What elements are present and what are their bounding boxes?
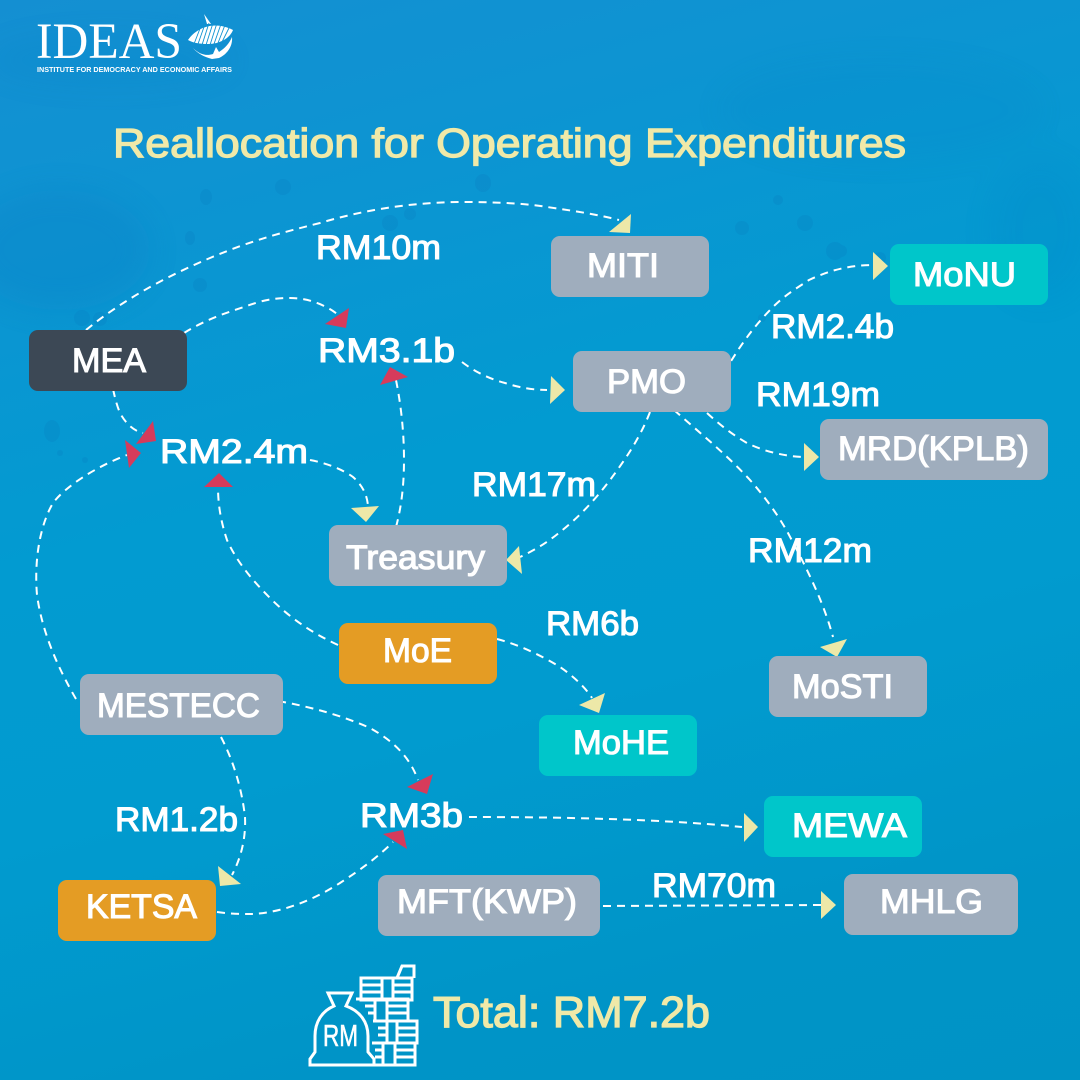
- box: KETSA: KETSA: [86, 888, 197, 926]
- box: MoNU: [890, 244, 1048, 305]
- box: MESTECC: [80, 674, 283, 735]
- box: MRD(KPLB): MRD(KPLB): [838, 430, 1029, 468]
- arrow: PMO to MoNU: [724, 252, 888, 373]
- logo: IDEAS: IDEAS: [36, 14, 182, 70]
- label: RM2.4b: RM2.4b: [771, 308, 894, 346]
- icon: money bag and stacks: RM: [323, 1018, 358, 1053]
- label: RM12m: RM12m: [748, 532, 872, 570]
- arrow: MESTECC to KETSA: [218, 737, 245, 886]
- arrow: MEA to RM2.4m: [113, 389, 156, 444]
- box: MHLG: MHLG: [880, 883, 983, 921]
- box: MoSTI: [769, 656, 927, 717]
- box: Treasury: [329, 525, 507, 586]
- box: MoE: [339, 623, 497, 684]
- box: MESTECC: MESTECC: [97, 687, 260, 725]
- arrow: MESTECC to RM3b: [278, 701, 433, 794]
- arrow: PMO to MoSTI: [674, 410, 847, 657]
- box: Treasury: Treasury: [346, 539, 485, 577]
- box: MEWA: MEWA: [792, 807, 907, 845]
- box: MEWA: [764, 796, 922, 857]
- arrow: RM3.1b to PMO: [462, 362, 565, 404]
- label: RM1.2b: RM1.2b: [115, 801, 238, 839]
- arrow: RM3b to MEWA: [469, 813, 758, 842]
- arrow: PMO to Treasury: [506, 412, 650, 574]
- label: RM3b: RM3b: [360, 797, 463, 835]
- box: MoHE: [539, 715, 697, 776]
- box: PMO: [573, 351, 731, 412]
- box: KETSA: [58, 880, 216, 941]
- title: Reallocation for Operating Expenditures: [113, 120, 906, 166]
- label: RM10m: RM10m: [316, 229, 441, 267]
- label: RM2.4m: RM2.4m: [160, 433, 308, 471]
- box: MEA: MEA: [72, 342, 146, 380]
- box: MoHE: MoHE: [573, 724, 669, 762]
- label: RM70m: RM70m: [652, 867, 776, 905]
- total label: Total: RM7.2b: [433, 988, 710, 1037]
- box: MoNU: MoNU: [913, 256, 1016, 294]
- arrow: PMO to MRD: [707, 413, 819, 471]
- label: RM17m: RM17m: [472, 466, 596, 504]
- label: RM19m: RM19m: [756, 376, 880, 414]
- box: MHLG: [844, 874, 1018, 935]
- arrow: MEA to RM3.1b: [184, 298, 349, 333]
- label: RM3.1b: RM3.1b: [318, 332, 455, 370]
- box: MoE: MoE: [383, 632, 452, 670]
- box: MFT(KWP): MFT(KWP): [397, 883, 577, 921]
- box: MEA: [29, 330, 187, 391]
- arrow: MFT to MHLG: [603, 891, 836, 919]
- box: MITI: [551, 236, 709, 297]
- box: MITI: MITI: [587, 247, 659, 285]
- label: RM6b: RM6b: [546, 605, 639, 643]
- arrow: MESTECC to RM2.4m: [36, 440, 141, 699]
- box: MFT(KWP): [378, 875, 600, 936]
- box: MoSTI: MoSTI: [792, 668, 893, 706]
- arrow: MoE to RM2.4m: [204, 473, 338, 645]
- box: MRD(KPLB): [820, 419, 1048, 480]
- arrow: MoE to MoHE: [497, 639, 605, 713]
- box: PMO: PMO: [607, 363, 686, 401]
- arrow: RM2.4m to Treasury: [310, 460, 379, 522]
- arrow: Treasury to RM3.1b: [380, 367, 408, 527]
- arrow: MEA to MITI: [86, 202, 631, 330]
- logo: IDEAS: INSTITUTE FOR DEMOCRACY AND ECONOMIC AFFAIRS: [37, 65, 232, 74]
- arrow: KETSA to RM3b: [217, 830, 407, 914]
